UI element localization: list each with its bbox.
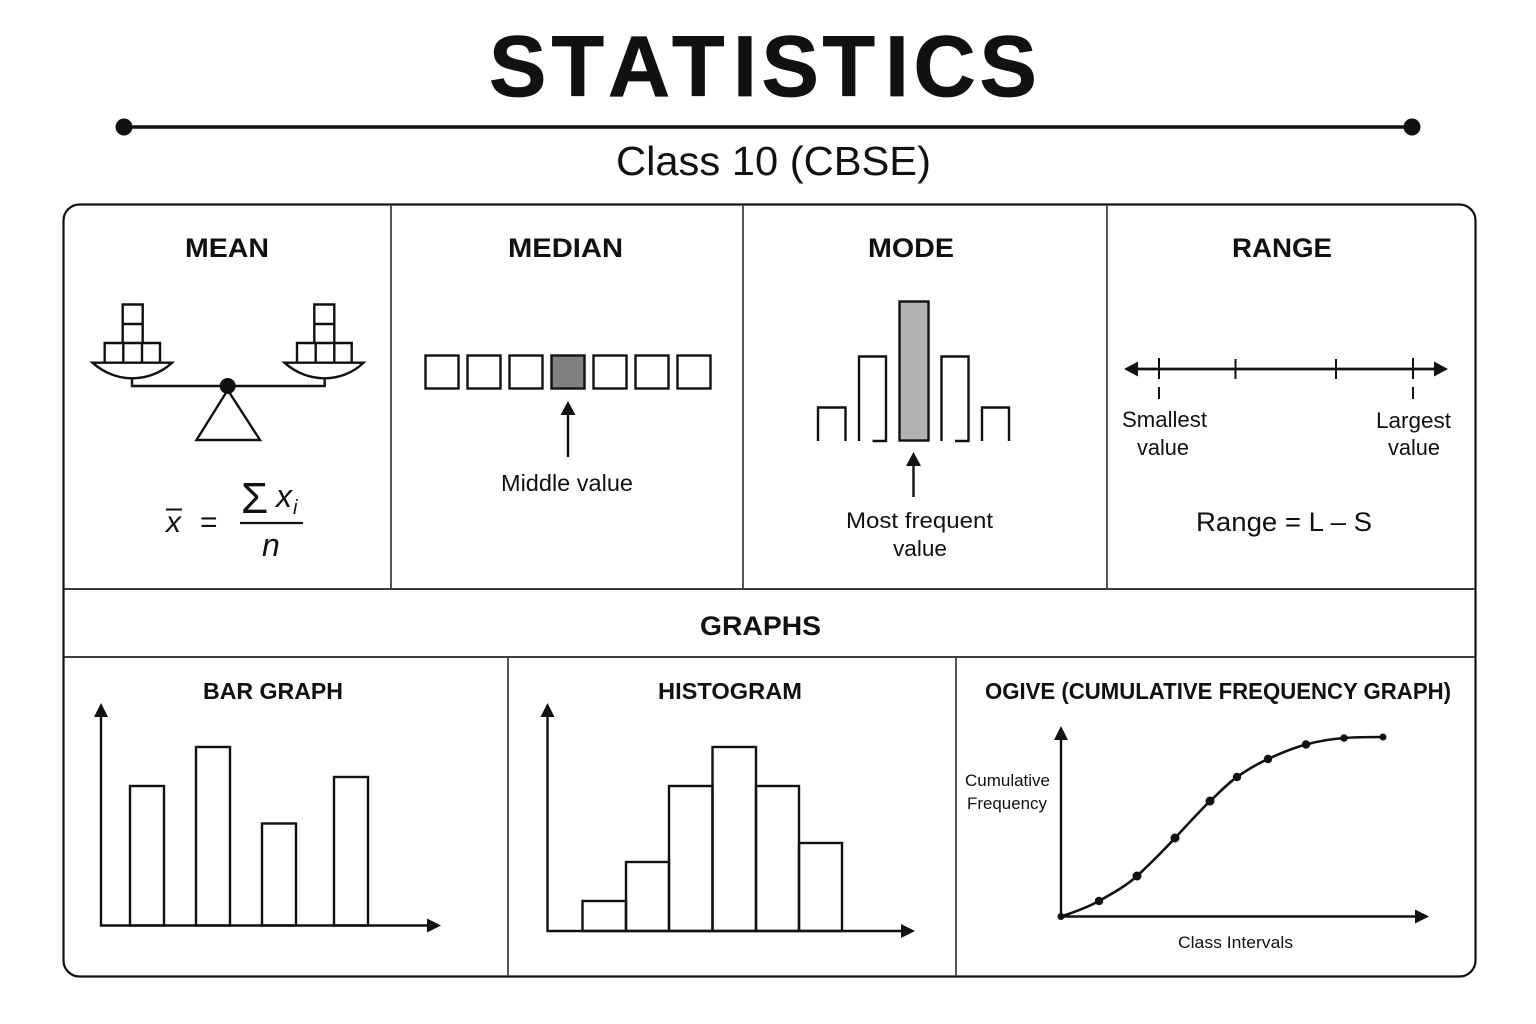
icon: row of seven value boxes [426, 356, 710, 388]
title: STATISTICS [489, 19, 1037, 115]
chart bars: histogram [582, 747, 842, 931]
label: smallest value [1122, 407, 1207, 460]
heading: mode: MODE [868, 233, 954, 263]
formula: range: Range = L – S [1196, 507, 1372, 537]
title rule with end dots [116, 118, 1420, 136]
main panel [64, 204, 1476, 976]
y axis label: Frequency [967, 794, 1047, 813]
chart bars: bar graph [130, 747, 368, 926]
icon: mode bars [818, 302, 1009, 441]
panel: mean [92, 233, 364, 563]
heading: bar graph: BAR GRAPH [203, 678, 343, 704]
panel: ogive [965, 678, 1451, 952]
label: most frequent value: value [893, 536, 947, 561]
y axis label: Cumulative [965, 771, 1050, 790]
heading: median: MEDIAN [508, 233, 623, 263]
arrow: to middle value [560, 401, 576, 457]
formula: mean: x [164, 506, 182, 539]
heading: histogram: HISTOGRAM [658, 678, 802, 704]
panel: bar graph [94, 678, 441, 932]
formula: mean: n [262, 527, 280, 563]
panel: mode [818, 233, 1009, 561]
heading: graphs: GRAPHS [700, 611, 821, 641]
chart axes: bar graph [94, 703, 441, 932]
formula: mean: x [274, 478, 293, 514]
heading: range: RANGE [1232, 233, 1332, 263]
formula: mean: i [293, 497, 298, 519]
panel: range [1122, 233, 1451, 537]
label: largest value: value [1388, 435, 1440, 460]
formula: mean: = [200, 506, 218, 539]
label: smallest value: value [1137, 435, 1189, 460]
formula: mean [164, 474, 303, 563]
chart axes: histogram [540, 703, 915, 938]
label: largest value: Largest [1376, 408, 1451, 433]
arrow: to most frequent value [906, 452, 921, 497]
icon: balance scale [92, 304, 364, 440]
ogive curve with points [1058, 734, 1386, 920]
label: most frequent value [846, 508, 994, 561]
panel: histogram [540, 678, 915, 938]
formula: mean: Σ [241, 474, 268, 523]
chart axes: ogive [1054, 726, 1429, 924]
label: most frequent value: Most frequent [846, 508, 994, 533]
panel: median [426, 233, 710, 496]
heading: mean: MEAN [185, 233, 269, 263]
heading: ogive: OGIVE (CUMULATIVE FREQUENCY GRAPH) [985, 678, 1451, 704]
x axis label: Class Intervals [1178, 933, 1293, 952]
subtitle: Class 10 (CBSE) [616, 138, 931, 184]
icon: number line [1124, 358, 1448, 399]
y axis label [965, 771, 1050, 813]
label: largest value [1376, 408, 1451, 460]
label: middle value: Middle value [501, 470, 633, 496]
label: smallest value: Smallest [1122, 407, 1207, 432]
